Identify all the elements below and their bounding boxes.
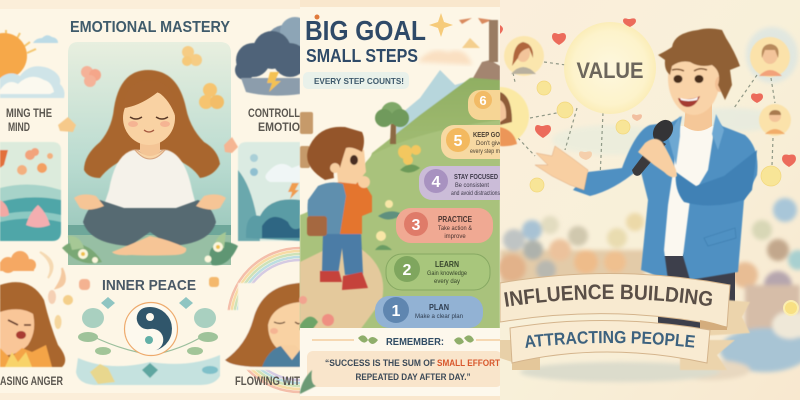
icon: storm cloud [235, 17, 310, 96]
label: releasing anger: ASING ANGER [0, 376, 64, 388]
heading: inner peace: INNER PEACE [102, 277, 196, 294]
icon: glowing coin [784, 301, 798, 315]
icon: yin yang with leaves [78, 297, 218, 356]
character: peaceful girl [222, 283, 300, 370]
panel: waves scene [238, 142, 300, 241]
step 4: stay focused: Be consistent [455, 183, 489, 189]
step 2: learn: 2 [403, 262, 412, 279]
tree [375, 102, 409, 144]
character: speaker head [658, 28, 740, 115]
background soft blue washes [552, 27, 798, 155]
step 1: plan: PLAN [429, 303, 449, 312]
girl: crossed legs [74, 194, 226, 256]
step 5: keep going: 5 [454, 133, 463, 150]
callout: remember quote: REPEATED DAY AFTER DAY.” [356, 372, 471, 383]
step 1: plan: Make a clear plan [415, 314, 463, 320]
step 2: learn [386, 254, 490, 290]
avatar: woman top right [750, 37, 790, 77]
step 5: keep going: every step m [470, 149, 500, 155]
label: controlling emotions: EMOTIO [258, 122, 300, 134]
panel: influence building [500, 0, 800, 400]
icon: microphone [632, 120, 674, 176]
character: speaker jacket [573, 116, 758, 280]
step 3: practice: PRACTICE [438, 215, 473, 224]
crowd silhouettes [498, 198, 800, 382]
signpost [300, 112, 313, 168]
step 6 [468, 90, 518, 120]
step 4: stay focused: STAY FOCUSED [454, 172, 498, 181]
step 4: stay focused [419, 166, 519, 200]
network connection lines [513, 62, 775, 178]
panel: meditating girl [58, 42, 238, 294]
character: speaker trousers [658, 252, 735, 332]
step 1: plan [375, 296, 483, 328]
step 1: plan: 1 [392, 303, 401, 320]
step 5: keep going: KEEP GO [473, 130, 500, 139]
label: controlling emotions: CONTROLL [248, 108, 300, 120]
panel: emotional mastery [0, 0, 372, 400]
label: calming the mind: MING THE [6, 108, 52, 120]
character: speaker shirt [662, 126, 714, 256]
flowers on ground [299, 200, 402, 330]
icon: value orb [564, 22, 656, 114]
panel: big goal small steps [299, 0, 521, 400]
icon: rainbow [228, 248, 372, 392]
character: speaker neck [684, 104, 712, 131]
title: emotional mastery: EMOTIONAL MASTERY [70, 19, 230, 36]
sandy path [300, 240, 383, 330]
banner: every step counts [303, 72, 409, 89]
step 4: stay focused: and avoid distractions [451, 191, 500, 197]
step 3: practice: improve [444, 234, 466, 240]
label: controlling emotions [248, 108, 300, 134]
step 2: learn: every day [434, 279, 460, 285]
avatar: woman top left [504, 36, 544, 76]
foliage at meditation base [62, 232, 238, 265]
scene strip under yin yang [76, 355, 220, 385]
smoke and flames [0, 251, 219, 329]
step 3: practice: Take action & [438, 226, 472, 232]
panel: pond scene [0, 142, 61, 241]
icon: hearts [500, 18, 796, 167]
title: big goal small steps: SMALL STEPS [306, 45, 418, 66]
ribbon: influence building [500, 273, 750, 336]
girl: hair back [84, 70, 220, 178]
character: speaker hand holding mic [638, 139, 677, 177]
label: flowing with: FLOWING WIT [235, 376, 300, 388]
avatar: woman large left [500, 86, 530, 147]
step 5: keep going: Don't give [476, 141, 503, 147]
icon: star sparkle [429, 13, 453, 37]
title: big goal small steps [305, 14, 426, 66]
character: angry girl [0, 282, 65, 367]
step 3: practice [396, 208, 493, 243]
label: calming the mind [6, 108, 52, 134]
step 5: keep going [441, 125, 521, 159]
step 3: practice: 3 [412, 217, 421, 234]
decorative flowers [58, 46, 238, 153]
step 6: 6 [479, 93, 487, 108]
callout: remember quote [300, 328, 502, 396]
banner: every step counts: EVERY STEP COUNTS! [314, 76, 404, 86]
avatar: person mid right [759, 104, 791, 136]
ribbon: attracting people: ATTRACTING PEOPLE [525, 330, 695, 348]
icon: golden tokens [530, 81, 781, 192]
jacket front arm and pocket [668, 114, 757, 246]
callout: remember quote: SMALL EFFORT [437, 358, 500, 369]
character: boy looking up [307, 127, 372, 290]
callout: remember quote: REMEMBER: [386, 336, 444, 348]
title: big goal small steps: BIG GOAL [305, 15, 426, 46]
mountains and sky [360, 18, 500, 200]
step 2: learn: LEARN [435, 260, 459, 269]
character: speaker open hand [535, 146, 588, 190]
callout: remember quote: “SUCCESS IS THE SUM OF [325, 358, 435, 369]
grass hillside [300, 120, 500, 330]
girl: face [122, 80, 176, 156]
label: calming the mind: MIND [8, 122, 30, 134]
ribbon: influence building: INFLUENCE BUILDING [504, 284, 712, 307]
girl: shirt [104, 150, 196, 210]
step 4: stay focused: 4 [432, 174, 441, 191]
step 2: learn: Gain knowledge [427, 271, 468, 277]
icon: sun and cloud [0, 30, 64, 98]
ribbon: attracting people [500, 320, 735, 370]
icon: value orb: VALUE [576, 58, 644, 83]
flower marker 5 [398, 145, 421, 173]
